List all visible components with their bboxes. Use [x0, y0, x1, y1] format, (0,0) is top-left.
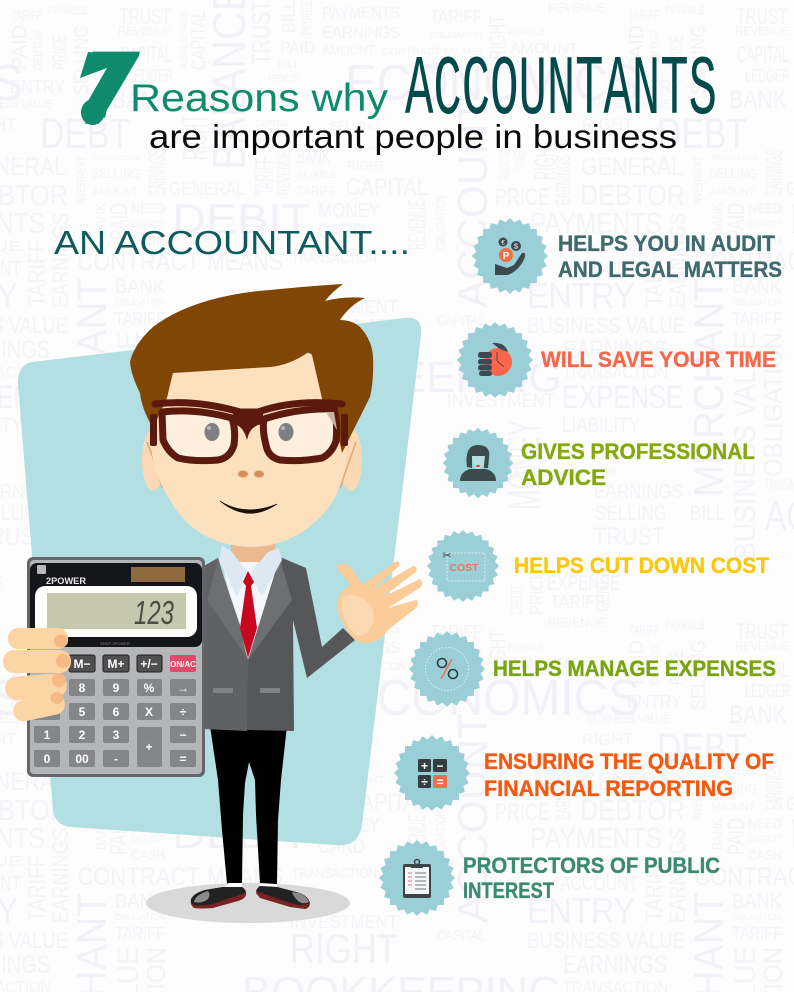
calculator keys — [34, 655, 196, 767]
calculator keys: = — [179, 752, 187, 766]
title: Reasons why: Reasons why — [130, 77, 389, 120]
ears — [142, 429, 362, 491]
calculator keys: 8 — [79, 681, 86, 695]
reason 5 — [410, 632, 776, 706]
calculator keys: ON/AC — [170, 660, 196, 669]
floor shadow — [146, 883, 350, 923]
reason text: WILL SAVE YOUR TIME — [541, 347, 776, 372]
badge: cost coupon: COST — [449, 562, 479, 574]
badge: coins in hand: P — [503, 251, 510, 262]
red tie — [240, 571, 257, 658]
badge: calculator keys: + — [421, 759, 428, 773]
reason 2 — [458, 323, 776, 397]
reason text — [484, 749, 774, 801]
reason text: ADVICE — [521, 465, 606, 490]
reason text — [558, 231, 782, 282]
reason text — [521, 439, 755, 490]
calculator keys: M+ — [107, 657, 125, 671]
reason 7 — [380, 841, 720, 915]
title — [79, 26, 717, 155]
shirt collar — [219, 545, 282, 597]
calculator body — [27, 557, 205, 777]
calculator keys: + — [145, 740, 153, 754]
badge: coins in hand: $ — [514, 244, 518, 250]
display: 123 — [134, 594, 174, 631]
reason text: HELPS YOU IN AUDIT — [558, 231, 776, 256]
calculator keys: 0 — [44, 752, 51, 766]
calculator keys: 3 — [113, 728, 120, 742]
jacket — [204, 557, 355, 731]
trousers — [210, 726, 287, 884]
badge: fist with clock — [458, 323, 532, 397]
brand: SDDP-2POWER — [100, 641, 130, 646]
reason 1 — [473, 219, 782, 293]
heading: an accountant: AN ACCOUNTANT.... — [54, 224, 410, 261]
reason text: ENSURING THE QUALITY OF — [484, 749, 774, 774]
calculator keys: 4 — [44, 705, 51, 719]
badge: calculator keys: ÷ — [421, 775, 428, 789]
nose — [238, 470, 264, 478]
reason text: GIVES PROFESSIONAL — [521, 439, 755, 464]
calculator keys: 2 — [79, 728, 86, 742]
face — [150, 352, 347, 547]
glasses — [150, 403, 348, 461]
badge: cost coupon — [428, 531, 498, 601]
calculator top panel — [30, 563, 202, 647]
badge: coins in hand: € — [501, 240, 505, 246]
calculator keys: M− — [73, 657, 91, 671]
badge: adviser portrait — [444, 429, 512, 497]
calculator keys: 9 — [113, 681, 120, 695]
shoes — [191, 883, 310, 909]
badge: calculator keys: = — [436, 775, 444, 789]
accountant character — [130, 284, 422, 909]
smile — [220, 501, 277, 513]
reason text: PROTECTORS OF PUBLIC — [463, 853, 720, 878]
badge: coins in hand — [473, 219, 547, 293]
calculator — [3, 557, 205, 777]
reason 6 — [395, 736, 774, 810]
calculator keys: ÷ — [180, 705, 187, 719]
hand holding calculator — [3, 628, 71, 723]
badge: percent — [410, 632, 484, 706]
hair — [130, 284, 373, 453]
waving hand — [337, 562, 422, 643]
reason text: HELPS MANAGE EXPENSES — [493, 656, 776, 681]
calculator keys: 1 — [44, 728, 51, 742]
shirt — [222, 562, 280, 660]
badge: calculator keys: − — [436, 759, 444, 773]
calculator keys: 00 — [75, 752, 89, 766]
reason text: FINANCIAL REPORTING — [484, 776, 733, 801]
display — [35, 586, 197, 637]
calculator keys: → — [177, 681, 189, 695]
calculator keys: 5 — [79, 705, 86, 719]
reason text: AND LEGAL MATTERS — [558, 257, 782, 282]
reason 4 — [428, 531, 770, 601]
brand — [37, 565, 130, 646]
badge: clipboard — [380, 841, 454, 915]
title number 7: 7 — [80, 26, 140, 148]
calculator keys: 6 — [113, 705, 120, 719]
eyes — [204, 423, 294, 441]
subtitle: are important people in business — [149, 118, 677, 155]
calculator keys: +/− — [140, 657, 158, 671]
calculator keys: % — [144, 681, 155, 695]
neck — [231, 535, 275, 578]
reason text: HELPS CUT DOWN COST — [514, 553, 770, 578]
pale blue panel behind character — [18, 318, 421, 845]
badge: cost coupon: ✂ — [442, 549, 452, 562]
brand: 2POWER — [46, 576, 86, 587]
calculator keys: X — [145, 705, 153, 719]
solar cell — [131, 567, 185, 582]
reason text — [463, 853, 720, 903]
reason text: INTEREST — [463, 878, 554, 903]
calculator keys: - — [114, 752, 118, 766]
reason 3 — [444, 429, 755, 497]
badge: calculator keys — [395, 736, 469, 810]
calculator keys: − — [179, 728, 187, 742]
